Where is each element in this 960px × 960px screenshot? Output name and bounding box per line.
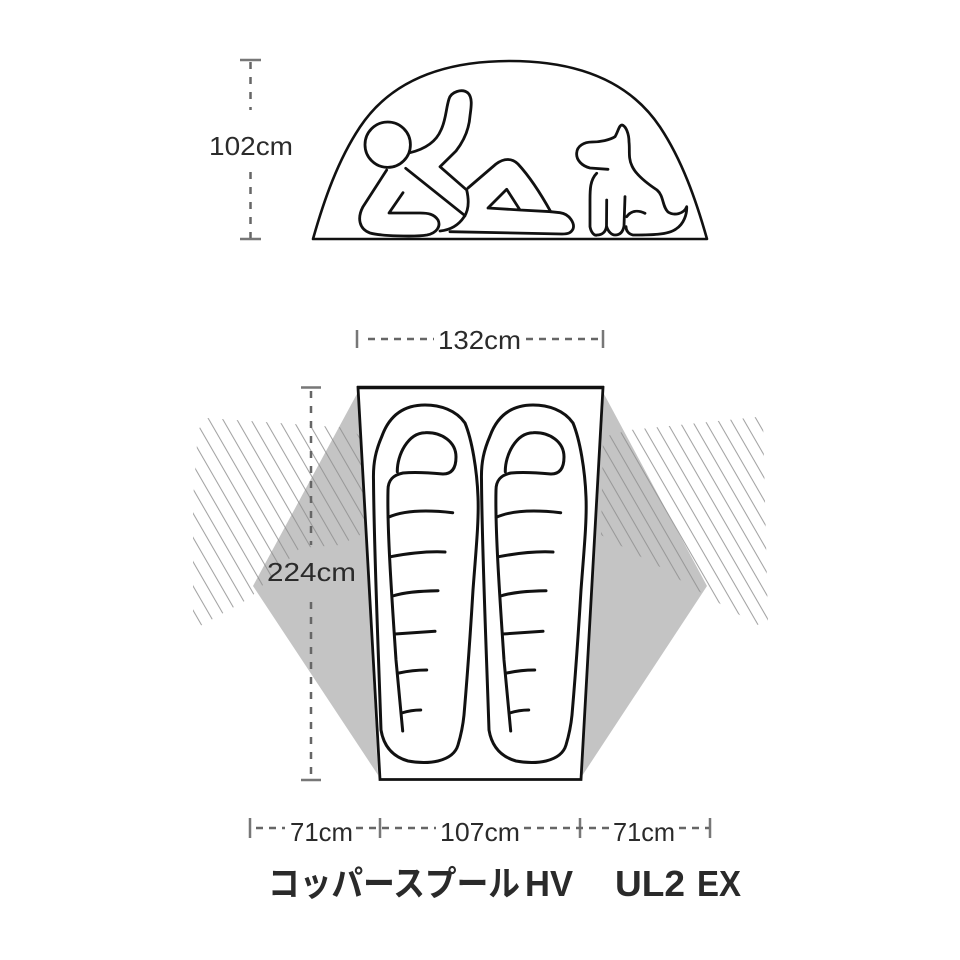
width dimension 132cm: 132cm <box>438 325 521 355</box>
product name title: コッパースプール <box>268 865 520 904</box>
tent floor fill <box>358 388 603 780</box>
bottom dimensions row: 71cm <box>290 817 353 847</box>
product name title: UL2 <box>615 863 685 904</box>
length dimension 224cm <box>267 388 356 780</box>
bottom dimensions row: 71cm <box>613 817 675 847</box>
product name title: EX <box>697 863 741 904</box>
right ground hatching <box>601 417 768 625</box>
tent side view illustration <box>313 61 707 239</box>
height dimension 102cm <box>209 60 293 239</box>
length dimension 224cm: 224cm <box>267 557 356 587</box>
left vestibule gray <box>253 392 378 775</box>
bottom dimensions row <box>250 817 710 847</box>
product name title <box>268 863 741 904</box>
top edge of floor <box>357 386 604 389</box>
tent floor stroke <box>358 388 603 780</box>
tent dome outline <box>313 61 707 239</box>
dog figure <box>577 125 687 235</box>
right sleeping bag <box>481 405 586 762</box>
bottom dimensions row: 107cm <box>440 817 520 847</box>
left sleeping bag <box>373 405 478 762</box>
left ground hatching <box>193 418 364 630</box>
height dimension 102cm: 102cm <box>209 131 293 161</box>
width dimension 132cm <box>357 325 603 355</box>
product name title: HV <box>525 863 573 904</box>
person figure <box>360 91 573 236</box>
right vestibule gray <box>582 394 707 776</box>
